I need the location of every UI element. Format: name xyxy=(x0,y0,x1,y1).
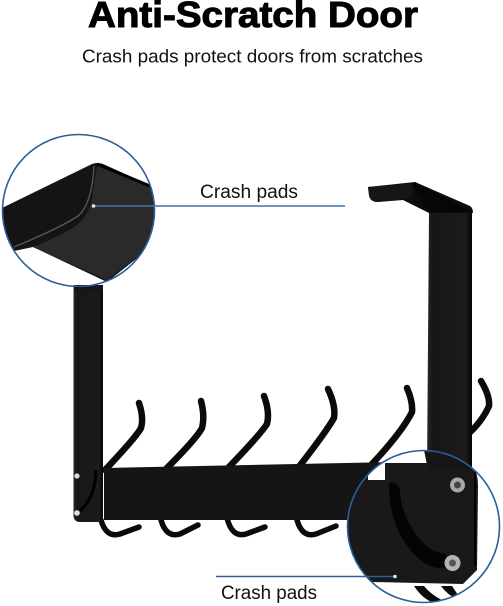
callout circle: top crash pad xyxy=(0,134,160,286)
label: top crash pads: Crash pads xyxy=(200,182,298,203)
neck below circle xyxy=(74,287,103,291)
left plate detail xyxy=(80,470,96,511)
callout circle: bottom crash pad xyxy=(346,450,500,604)
left arm xyxy=(74,285,103,522)
horizontal bar xyxy=(104,461,440,520)
upper hooks xyxy=(105,381,489,470)
subtitle: Crash pads protect doors from scratches xyxy=(82,46,423,66)
top flap xyxy=(368,182,473,213)
right arm xyxy=(427,212,472,470)
door hanger rack xyxy=(74,182,489,535)
callout line: bottom xyxy=(216,575,397,578)
callout line: top xyxy=(92,204,345,208)
label: bottom crash pads: Crash pads xyxy=(221,583,317,604)
lower hooks xyxy=(101,518,336,535)
